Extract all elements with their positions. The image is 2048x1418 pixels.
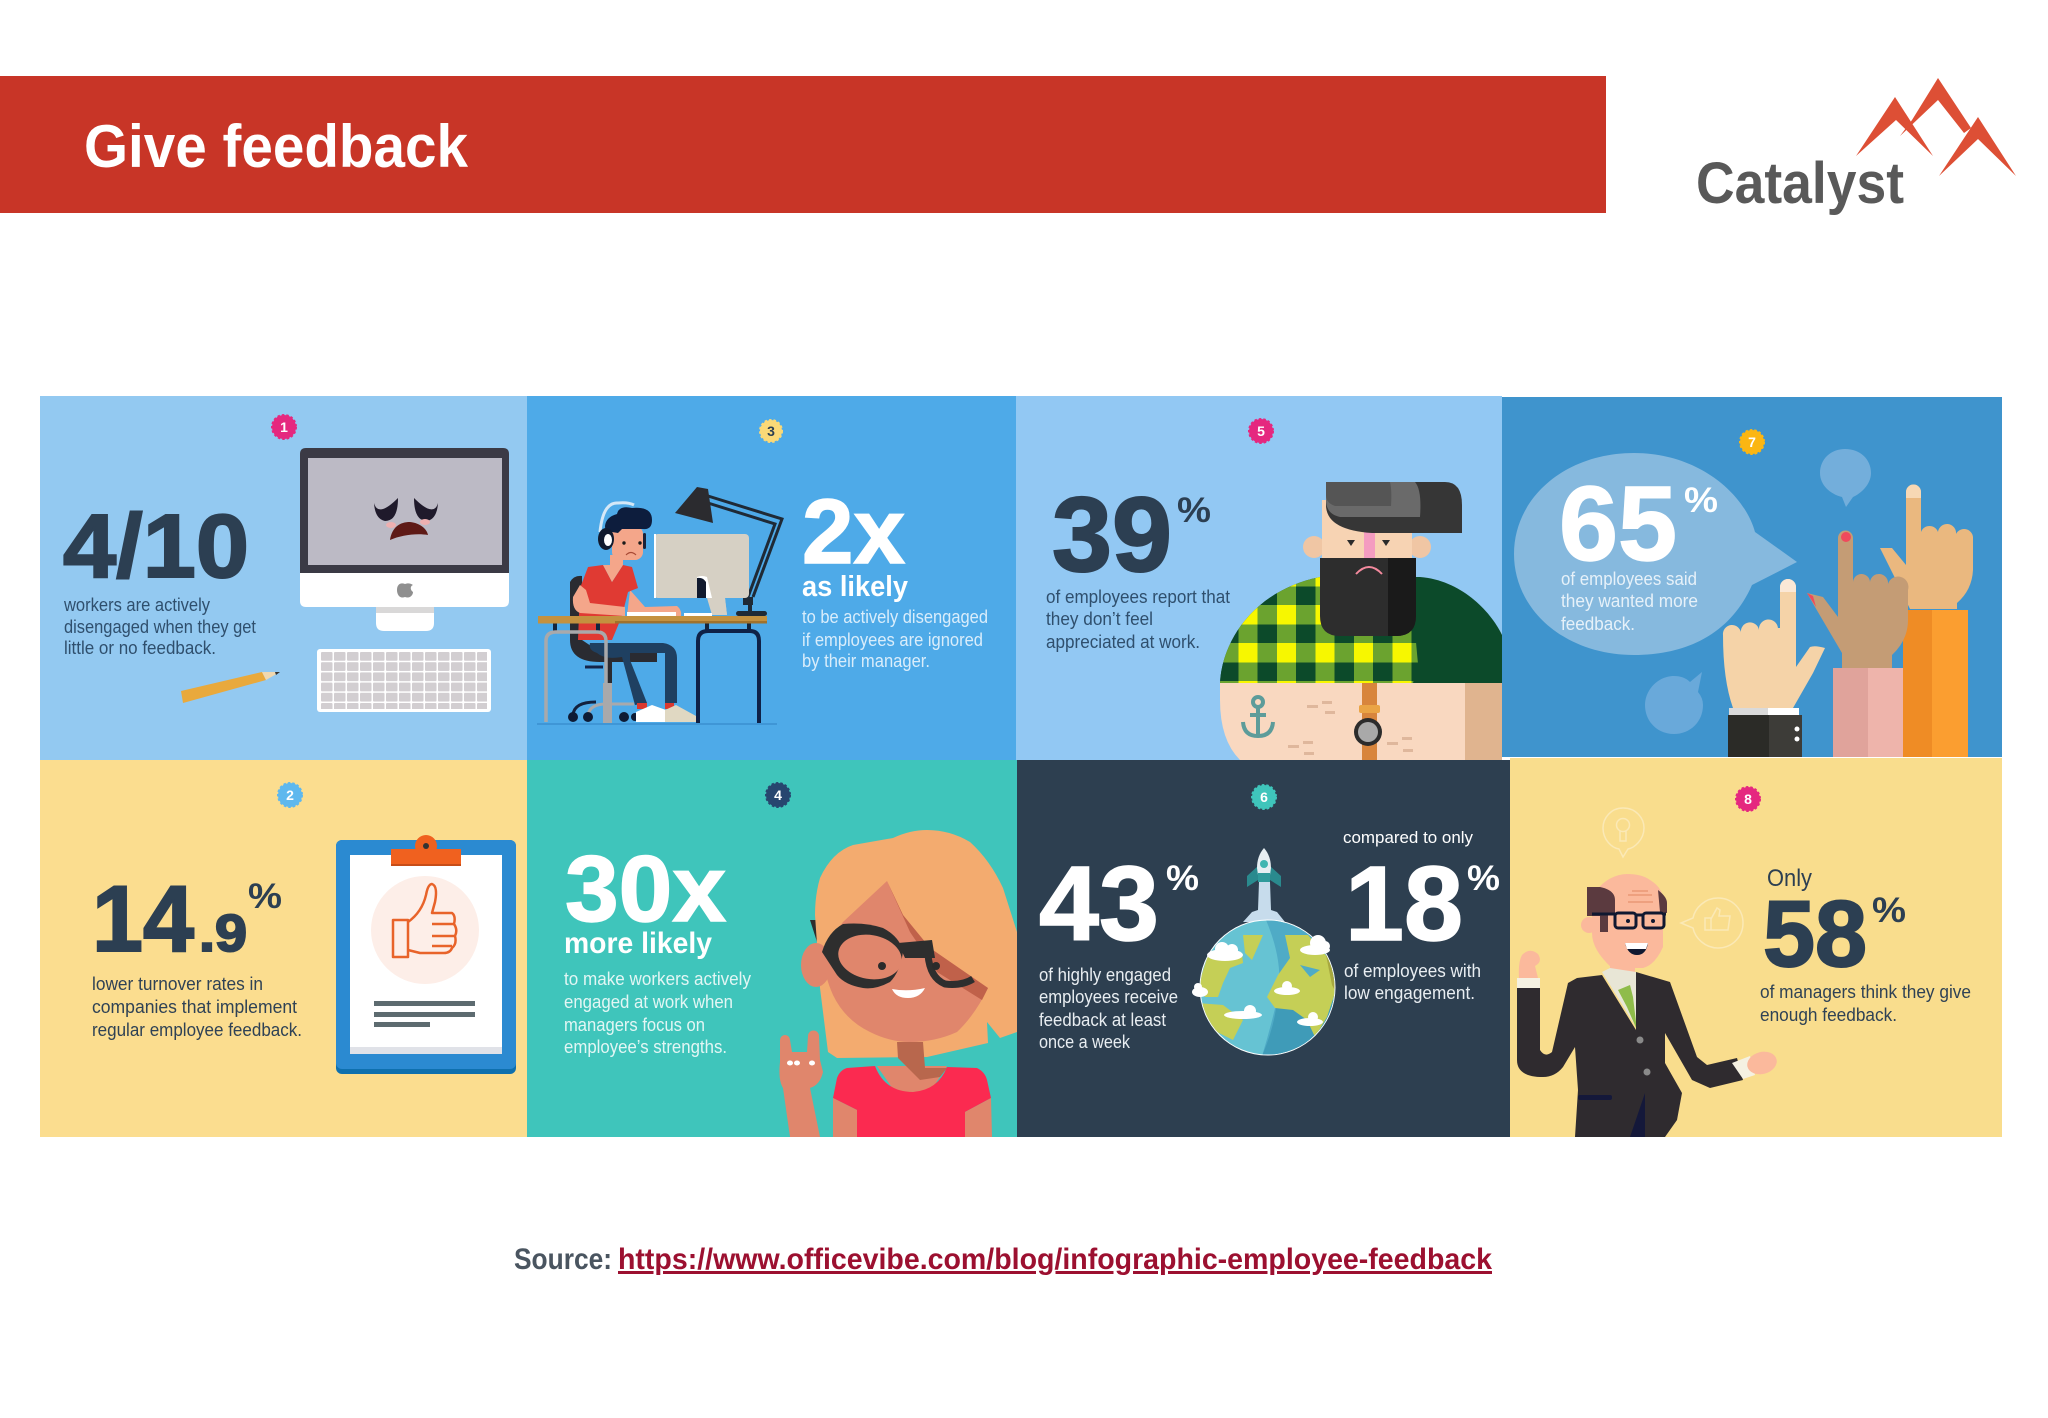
percent sign: % [1467, 859, 1500, 898]
percent sign: % [1872, 891, 1906, 930]
description: workers are actively [63, 595, 210, 615]
stat 18: 18 [1345, 845, 1463, 963]
suit [1517, 972, 1743, 1137]
stat 39: 39 [1052, 476, 1172, 594]
icon: thumb bubble [1681, 898, 1743, 948]
head [1581, 874, 1667, 968]
icon: lightbulb bubble [1603, 808, 1644, 857]
illustration: manager in suit [1517, 874, 1779, 1137]
description: to be actively disengaged [802, 607, 988, 627]
far arm [627, 590, 681, 616]
chair [568, 576, 657, 723]
percent sign: % [1166, 859, 1199, 898]
description: by their manager. [802, 651, 930, 671]
badge 3: 3 [767, 423, 775, 439]
header banner [0, 76, 1606, 213]
badge 8 [1736, 787, 1760, 811]
mouth [1625, 943, 1648, 955]
description: of employees said [1561, 569, 1697, 589]
badge 1: 1 [280, 419, 288, 435]
upper arms [833, 1098, 857, 1137]
badge 8: 8 [1744, 791, 1752, 807]
shoes [636, 705, 666, 722]
description right: of employees with [1344, 961, 1481, 981]
source link: https://www.officevibe.com/blog/infographic-employee-feedback [618, 1243, 1492, 1276]
stat 43: 43 [1039, 845, 1159, 963]
panel 7: 65 percent [1502, 397, 2002, 757]
description: appreciated at work. [1046, 632, 1200, 652]
panel 4: 30x more likely [527, 760, 1019, 1137]
raised hand [779, 1030, 823, 1137]
description [92, 974, 302, 1040]
shirt [833, 1066, 991, 1137]
percent sign: % [1684, 481, 1718, 520]
stat 2x: 2x [802, 481, 905, 583]
source line [514, 1243, 1492, 1276]
description [1046, 587, 1230, 652]
hair [1326, 482, 1462, 533]
trouser fly [1630, 1093, 1645, 1137]
description: of managers think they give [1760, 982, 1971, 1002]
face [822, 881, 988, 1042]
description: they wanted more [1561, 591, 1698, 611]
stat 58: 58 [1763, 881, 1867, 986]
person [573, 503, 696, 722]
illustration: man at desk [537, 487, 782, 725]
buttons [1636, 1036, 1644, 1044]
panel 1: 4/10 workers [40, 396, 527, 760]
icon: sad computer monitor [300, 448, 509, 631]
chest [877, 1066, 947, 1092]
ear [801, 943, 831, 987]
badge 2: 2 [286, 787, 294, 803]
panel 2: 14.9 percent [40, 760, 527, 1137]
shirt [578, 565, 638, 640]
badge 7: 7 [1748, 434, 1756, 450]
percent sign: % [1177, 491, 1211, 530]
logo wordmark: Catalyst [1696, 151, 1904, 216]
icon: clipboard with thumbs up [336, 835, 516, 1074]
description left: of highly engaged [1039, 965, 1171, 985]
rocket [1247, 848, 1281, 887]
left hand [1519, 951, 1540, 978]
logo: Catalyst [1696, 78, 2016, 216]
illustration: rocket and globe [1192, 848, 1340, 1056]
icon: pencil [181, 672, 280, 703]
collar and neck [1610, 955, 1635, 972]
icon: keyboard [317, 649, 491, 712]
neck [603, 555, 623, 582]
panel 8: only 58 percent [1510, 758, 2002, 1137]
comparison label: compared to only [1343, 828, 1473, 847]
stat 14: 14 [92, 866, 194, 971]
description right: low engagement. [1344, 983, 1475, 1003]
hand 1 black sleeve [1723, 579, 1825, 757]
description [802, 607, 988, 671]
description left: once a week [1039, 1032, 1131, 1052]
description: managers focus on [564, 1015, 705, 1035]
badge 4: 4 [774, 787, 782, 803]
glasses [1592, 913, 1666, 928]
panel 6: 43 vs 18 percent [1017, 760, 1510, 1137]
small bubble bottom [1645, 672, 1703, 734]
tie [1618, 985, 1637, 1030]
right hand [1745, 1048, 1779, 1078]
head [1303, 500, 1431, 636]
forearm [1220, 683, 1502, 760]
percent sign: % [248, 877, 282, 916]
glasses [822, 924, 973, 988]
source line: Source: [514, 1243, 612, 1276]
description [63, 595, 256, 658]
badge 6 [1252, 785, 1276, 809]
description: regular employee feedback. [92, 1020, 302, 1040]
badge 7 [1740, 430, 1764, 454]
stat 65: 65 [1559, 465, 1677, 583]
smile [892, 988, 925, 998]
description: lower turnover rates in [92, 974, 263, 994]
speech bubble [1514, 453, 1797, 655]
description: little or no feedback. [64, 638, 216, 658]
face [612, 526, 643, 560]
illustration: woman with glasses [779, 830, 1017, 1137]
description: enough feedback. [1760, 1005, 1897, 1025]
subheading: more likely [564, 927, 712, 960]
description: engaged at work when [564, 992, 733, 1012]
right cuff [1732, 1056, 1755, 1079]
rocket trail [1243, 882, 1285, 922]
badge 3 [760, 420, 782, 442]
panel 3: 2x as likely [527, 396, 1016, 760]
description [1760, 982, 1971, 1025]
hand 3 orange sleeve [1880, 485, 1973, 757]
description [564, 969, 751, 1057]
panel 5: 39 percent [1016, 396, 1502, 760]
left cuff [1517, 978, 1540, 988]
fringe shadow [887, 881, 988, 1000]
description: of employees report that [1046, 587, 1230, 607]
title: Give feedback [84, 113, 469, 180]
badge 4 [766, 783, 790, 807]
hand 2 pink sleeve [1807, 530, 1908, 757]
computer [654, 534, 749, 616]
badge 1 [272, 415, 296, 439]
illustration: sad bearded man [1220, 482, 1502, 760]
stat 4/10: 4/10 [63, 497, 249, 597]
lamp [675, 487, 782, 616]
subheading: as likely [802, 571, 908, 603]
description: disengaged when they get [64, 617, 256, 637]
legs [590, 643, 677, 705]
illustration: raised hands [1723, 485, 1973, 757]
description: employee’s strengths. [564, 1037, 727, 1057]
badge 2 [278, 783, 302, 807]
description: companies that implement [92, 997, 297, 1017]
badge 5 [1249, 419, 1273, 443]
plaid shirt [1220, 577, 1502, 683]
clouds [1192, 935, 1330, 1026]
description left: employees receive [1039, 987, 1178, 1007]
neck [897, 1042, 947, 1080]
stat decimal: .9 [199, 905, 247, 963]
badge 6: 6 [1260, 789, 1268, 805]
description right [1344, 961, 1481, 1003]
description [1561, 569, 1698, 634]
description: feedback. [1561, 614, 1635, 634]
eyes [878, 962, 886, 970]
description: to make workers actively [564, 969, 751, 989]
description: they don’t feel [1046, 609, 1153, 629]
glasses arm behind hair [810, 920, 825, 945]
arm [573, 585, 625, 616]
stat 30x: 30x [565, 836, 726, 941]
label only: Only [1767, 865, 1812, 892]
headphones [600, 503, 634, 532]
description: if employees are ignored [802, 630, 983, 650]
hair [815, 830, 1017, 1058]
pocket [1578, 1095, 1612, 1100]
desk [538, 616, 767, 723]
logo mountains [1856, 78, 2016, 176]
badge 5: 5 [1257, 423, 1265, 439]
small bubble top [1820, 449, 1871, 507]
description left: feedback at least [1039, 1010, 1166, 1030]
description left [1039, 965, 1178, 1052]
globe [1200, 920, 1336, 1056]
anchor tattoo [1243, 697, 1273, 736]
